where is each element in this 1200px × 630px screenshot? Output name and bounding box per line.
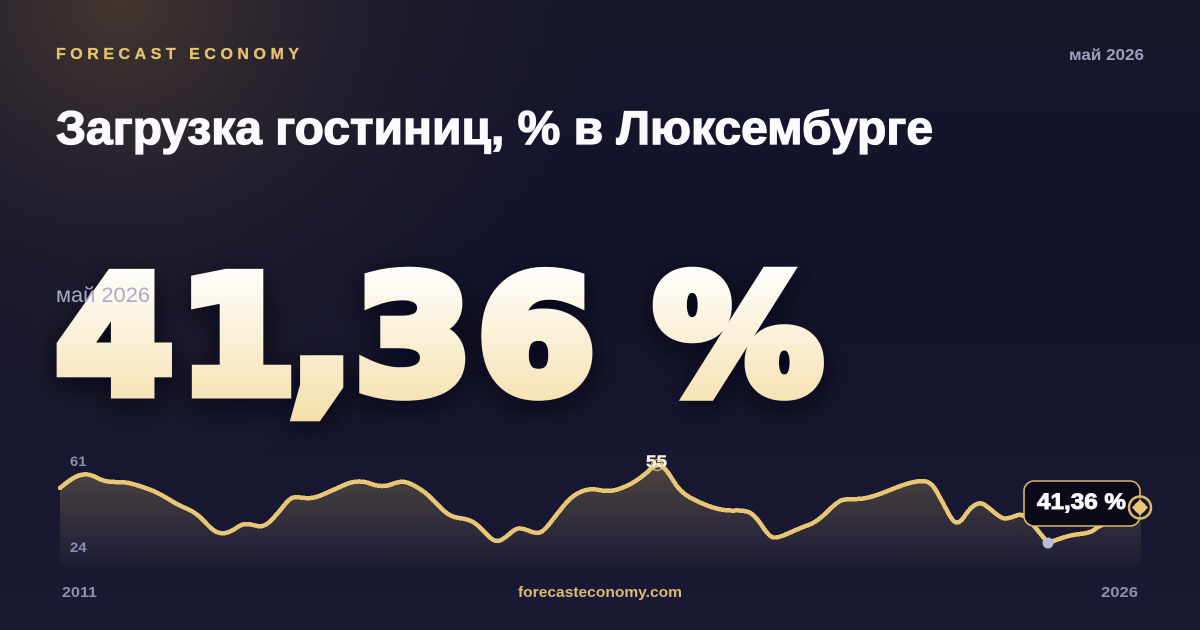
title: Загрузка гостиниц, % в Люксембурге [56, 101, 933, 154]
area chart [60, 452, 1141, 565]
current point marker [1129, 496, 1151, 518]
peak marker [652, 460, 662, 470]
source url: forecasteconomy.com [518, 585, 682, 601]
start year: 2011 [62, 584, 97, 601]
current value callout: 41,36 % [1037, 489, 1126, 514]
current value callout [1024, 481, 1140, 526]
price line [60, 465, 1140, 543]
end year: 2026 [1101, 584, 1138, 601]
area fill [60, 465, 1141, 565]
date label over value: май 2026 [56, 284, 150, 307]
date top right: май 2026 [1069, 47, 1144, 64]
big value: 41,36 % [56, 244, 822, 430]
brand label: FORECAST ECONOMY [56, 46, 299, 63]
axis max: 61 [70, 453, 87, 469]
peak label: 55 [646, 452, 667, 471]
axis min: 24 [70, 539, 87, 555]
low marker [1042, 538, 1054, 548]
